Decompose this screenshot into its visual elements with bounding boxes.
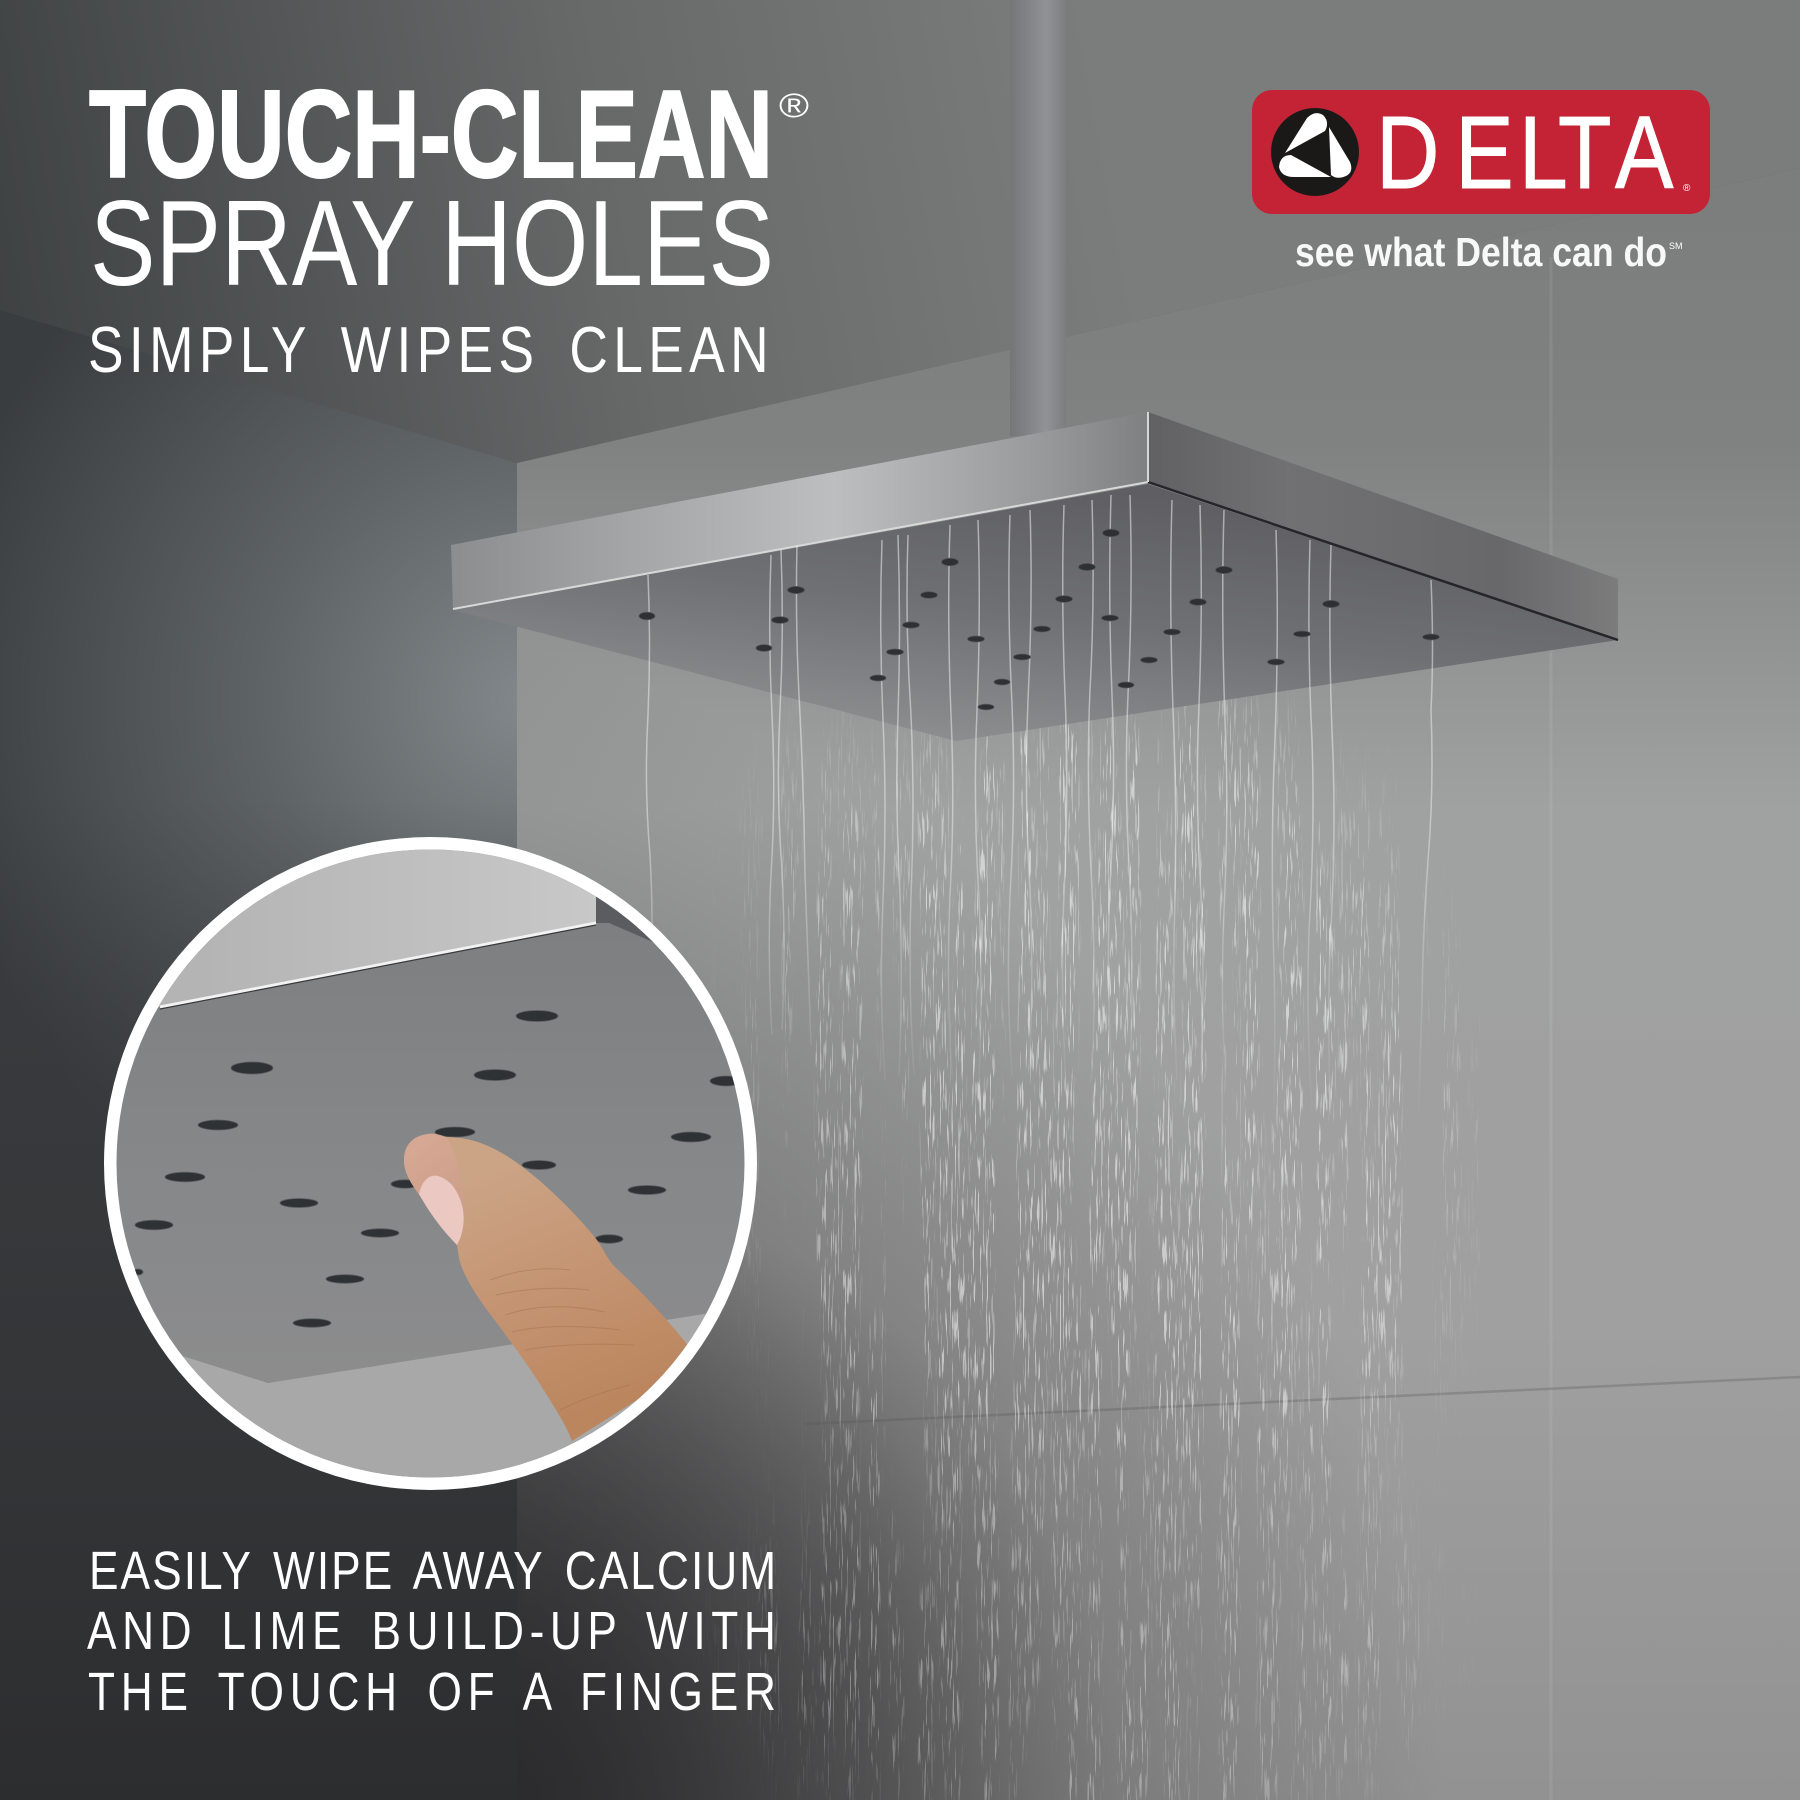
falling water spray	[736, 696, 1478, 1800]
spray holes	[639, 529, 1440, 710]
back wall	[517, 168, 1800, 1800]
description text	[87, 1541, 776, 1722]
left wall	[0, 310, 517, 1800]
fingertip	[404, 1134, 465, 1214]
service mark: SM	[1669, 241, 1682, 251]
spray holes close-up	[133, 1010, 742, 1327]
white ring	[104, 837, 757, 1490]
registered mark: ®	[779, 87, 809, 125]
title: spray holes: SPRAY HOLES	[90, 175, 774, 311]
ceiling	[0, 0, 1800, 463]
underside surface	[100, 840, 770, 1490]
close-up circle inset	[100, 837, 780, 1500]
Delta logo	[1252, 90, 1710, 275]
upper chrome band	[158, 850, 610, 1007]
chrome corner	[596, 896, 654, 942]
fingernail	[419, 1176, 464, 1245]
shower head	[451, 412, 1618, 1130]
red badge	[1252, 90, 1710, 214]
description text: THE TOUCH OF A FINGER	[88, 1662, 776, 1722]
shower head underside	[453, 484, 1618, 741]
title: touch-clean: TOUCH-CLEAN	[89, 66, 773, 204]
wordmark: DELTA	[1376, 95, 1674, 211]
subtitle: SIMPLY WIPES CLEAN	[88, 313, 769, 386]
tagline: see what Delta can do	[1295, 229, 1667, 275]
small registered mark: ®	[1683, 183, 1691, 194]
finger	[404, 1134, 700, 1441]
icon: Delta triangle mark	[1271, 108, 1359, 196]
shower head front face	[451, 412, 1148, 608]
ceiling pipe	[1010, 0, 1066, 436]
wall visible below head	[182, 1314, 706, 1478]
description text: EASILY WIPE AWAY CALCIUM	[89, 1541, 776, 1601]
shower head side face	[1148, 412, 1618, 639]
knuckle wrinkles	[490, 1269, 635, 1410]
water strands	[646, 495, 1432, 1130]
description text: AND LIME BUILD-UP WITH	[87, 1601, 776, 1661]
